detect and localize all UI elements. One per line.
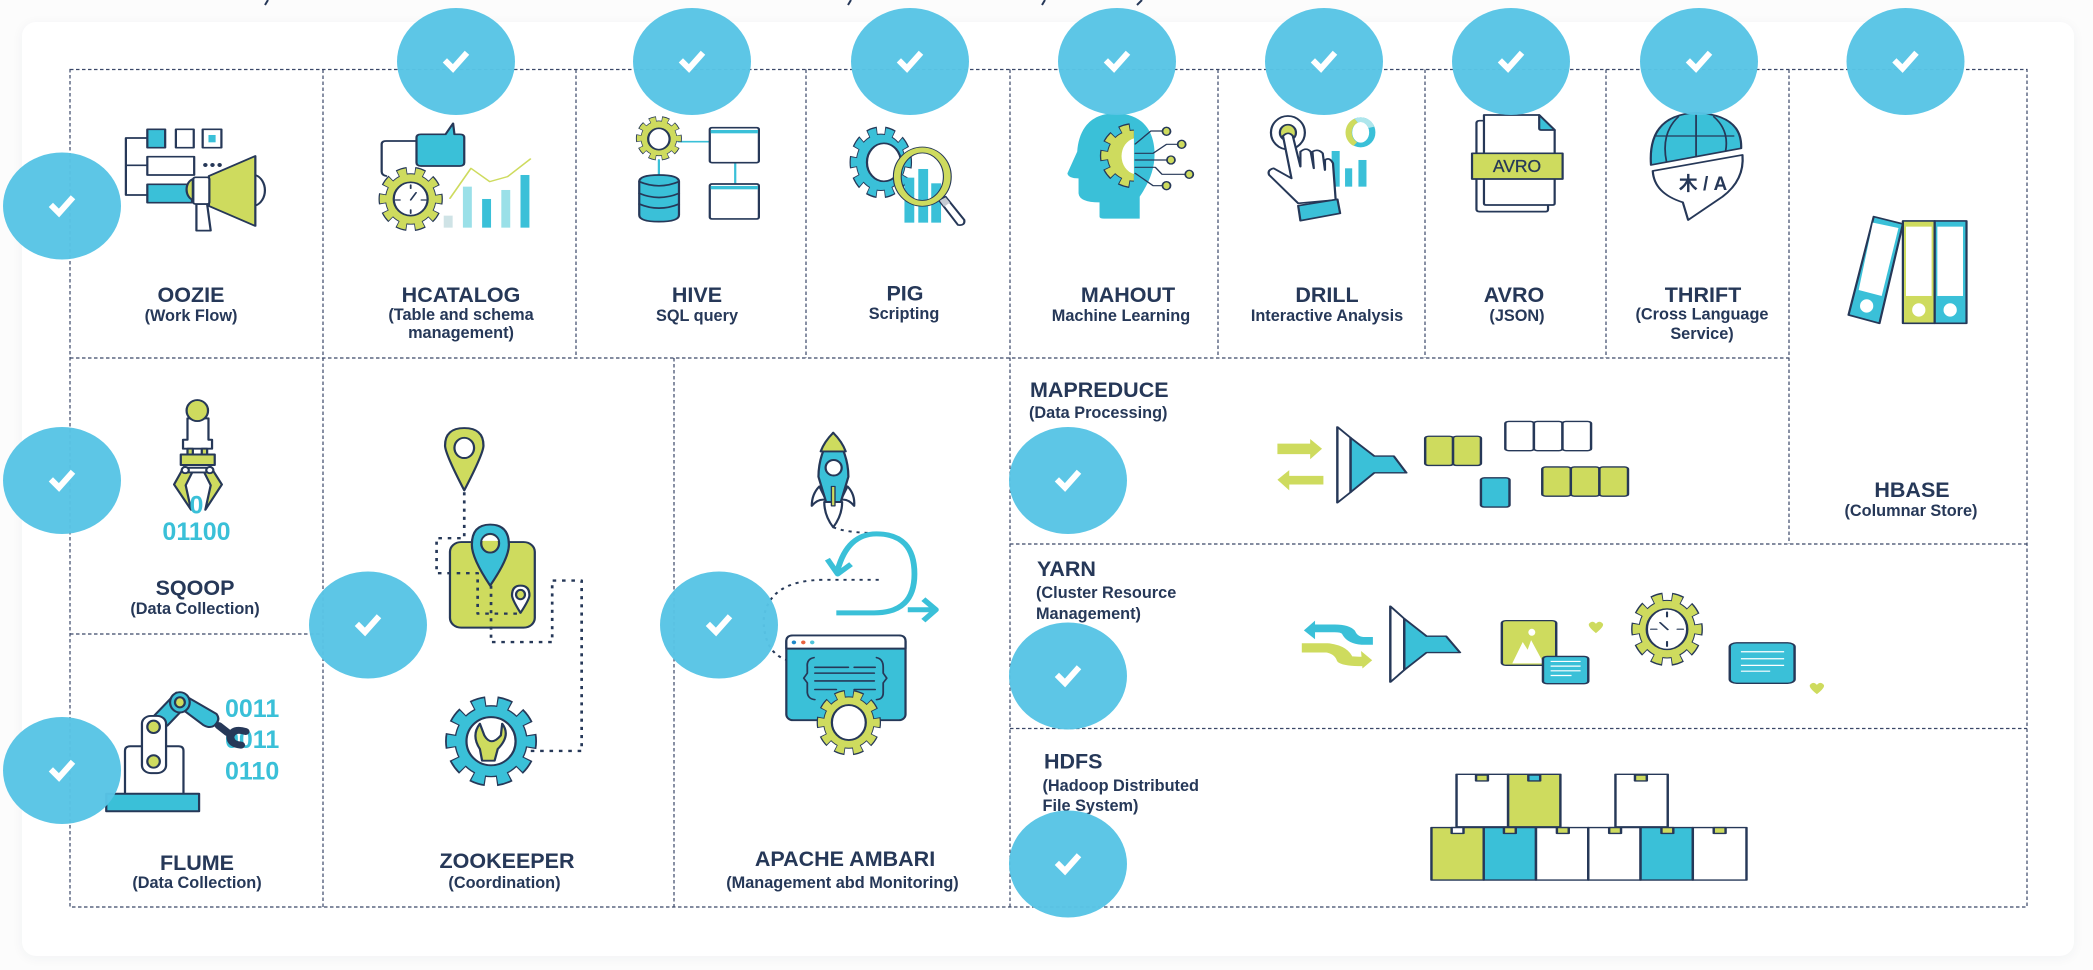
panel: hbase (1845, 217, 1977, 520)
icon: gear and chart (382, 123, 530, 228)
panel: sqoop (130, 400, 260, 618)
heading: sqoop: SQOOP (156, 576, 234, 600)
icon: avro file (1472, 115, 1563, 212)
badge: hive (633, 8, 751, 115)
icon: rocket, loop and code window (764, 433, 936, 751)
icon: binders (1849, 217, 1967, 323)
badge: flume (3, 717, 121, 824)
badge: yarn (1009, 622, 1127, 730)
caption: hadoop distributed file system: (Hadoop Distributed (1042, 777, 1199, 795)
heading: flume: FLUME (160, 851, 234, 875)
heading: mahout: MAHOUT (1081, 283, 1175, 307)
icon: claw with binary: 0 (190, 492, 203, 520)
panel: thrift (1636, 113, 1768, 343)
icon: robot arm with binary: 0011 (225, 726, 279, 754)
badge: avro (1452, 8, 1570, 115)
icon: funnel, image, gear and document (1302, 598, 1824, 694)
icon: avro file: AVRO (1493, 156, 1541, 176)
panel: mapreduce (1029, 378, 1628, 507)
caption: data collection: (Data Collection) (132, 874, 262, 892)
icon: globe and translation bubble: 木 / A (1679, 173, 1728, 195)
icon: megaphone workflow (126, 129, 265, 231)
caption: table and schema management: management) (408, 324, 514, 342)
panel: zookeeper (437, 428, 582, 892)
badge: ambari (660, 572, 778, 678)
caption: cluster resource management: Management) (1036, 605, 1141, 623)
badge: zookeeper (309, 572, 427, 678)
icon: head with gear and circuits (1067, 113, 1193, 219)
panel: pig (854, 132, 964, 323)
caption: data processing: (Data Processing) (1029, 404, 1167, 422)
caption: cross language service: (Cross Language (1636, 306, 1768, 324)
caption: management and monitoring: (Management abd Monitoring) (726, 874, 959, 892)
panel: avro (1472, 115, 1563, 325)
panel: hdfs (1042, 750, 1746, 880)
icon: gear and magnifier (854, 132, 964, 225)
badge: hcatalog (397, 8, 515, 115)
heading: hive: HIVE (672, 283, 722, 307)
badge: mahout (1058, 8, 1176, 115)
caption: columnar store: (Columnar Store) (1845, 502, 1977, 520)
badge: thrift (1640, 8, 1758, 115)
heading: pig: PIG (886, 282, 924, 306)
caption: cluster resource management: (Cluster Resource (1036, 584, 1176, 602)
caption: data collection: (Data Collection) (130, 600, 260, 618)
icon: storage boxes (1431, 774, 1746, 880)
icon: claw with binary (162, 400, 231, 546)
caption: work flow: (Work Flow) (145, 307, 237, 325)
panel: hcatalog (382, 123, 535, 342)
badge: hbase (1846, 8, 1964, 115)
heading: thrift: THRIFT (1665, 283, 1741, 307)
panel: hive (639, 119, 759, 325)
badge: sqoop (3, 427, 121, 534)
icon: robot arm with binary: 0110 (225, 758, 279, 786)
caption: cross language service: Service) (1670, 325, 1734, 343)
caption: hadoop distributed file system: File System) (1042, 797, 1138, 815)
heading: hbase: HBASE (1874, 478, 1950, 502)
caption: table and schema management: (Table and schema (388, 306, 534, 324)
icon: globe and translation bubble (1651, 113, 1743, 220)
heading: hdfs: HDFS (1044, 750, 1103, 774)
panel: yarn (1036, 557, 1824, 694)
caption: machine learning: Machine Learning (1052, 307, 1190, 325)
icon: robot arm with binary: 0011 (225, 695, 279, 723)
panel: oozie (126, 129, 265, 325)
heading: hcatalog: HCATALOG (402, 283, 520, 307)
icon: touch hand and dashboard (1269, 116, 1372, 221)
caption: scripting: Scripting (869, 305, 939, 323)
badge: drill (1265, 8, 1383, 115)
badge: oozie (3, 152, 121, 260)
caption: coordination: (Coordination) (448, 874, 561, 892)
panel: mahout (1052, 113, 1193, 325)
icon: funnel and data blocks (1277, 421, 1628, 507)
badge: mapreduce (1009, 427, 1127, 534)
panel: drill (1251, 116, 1403, 325)
caption: json: (JSON) (1489, 307, 1545, 325)
panel: apache ambari (726, 433, 959, 892)
badge: pig (851, 8, 969, 115)
heading: oozie: OOZIE (158, 283, 224, 307)
heading: yarn: YARN (1037, 557, 1096, 581)
heading: apache ambari: APACHE AMBARI (755, 847, 935, 871)
icon: map pins and wrench gear (437, 428, 582, 780)
caption: interactive analysis: Interactive Analysis (1251, 307, 1403, 325)
icon: claw with binary: 01100 (162, 518, 231, 546)
panel: flume (106, 692, 279, 892)
heading: mapreduce: MAPREDUCE (1030, 378, 1169, 402)
heading: avro: AVRO (1484, 283, 1544, 307)
icon: robot arm with binary (106, 692, 279, 811)
heading: drill: DRILL (1295, 283, 1359, 307)
icon: database and windows (639, 119, 759, 222)
caption: sql query: SQL query (656, 307, 738, 325)
heading: zookeeper: ZOOKEEPER (440, 849, 575, 873)
badge: hdfs (1009, 810, 1127, 918)
